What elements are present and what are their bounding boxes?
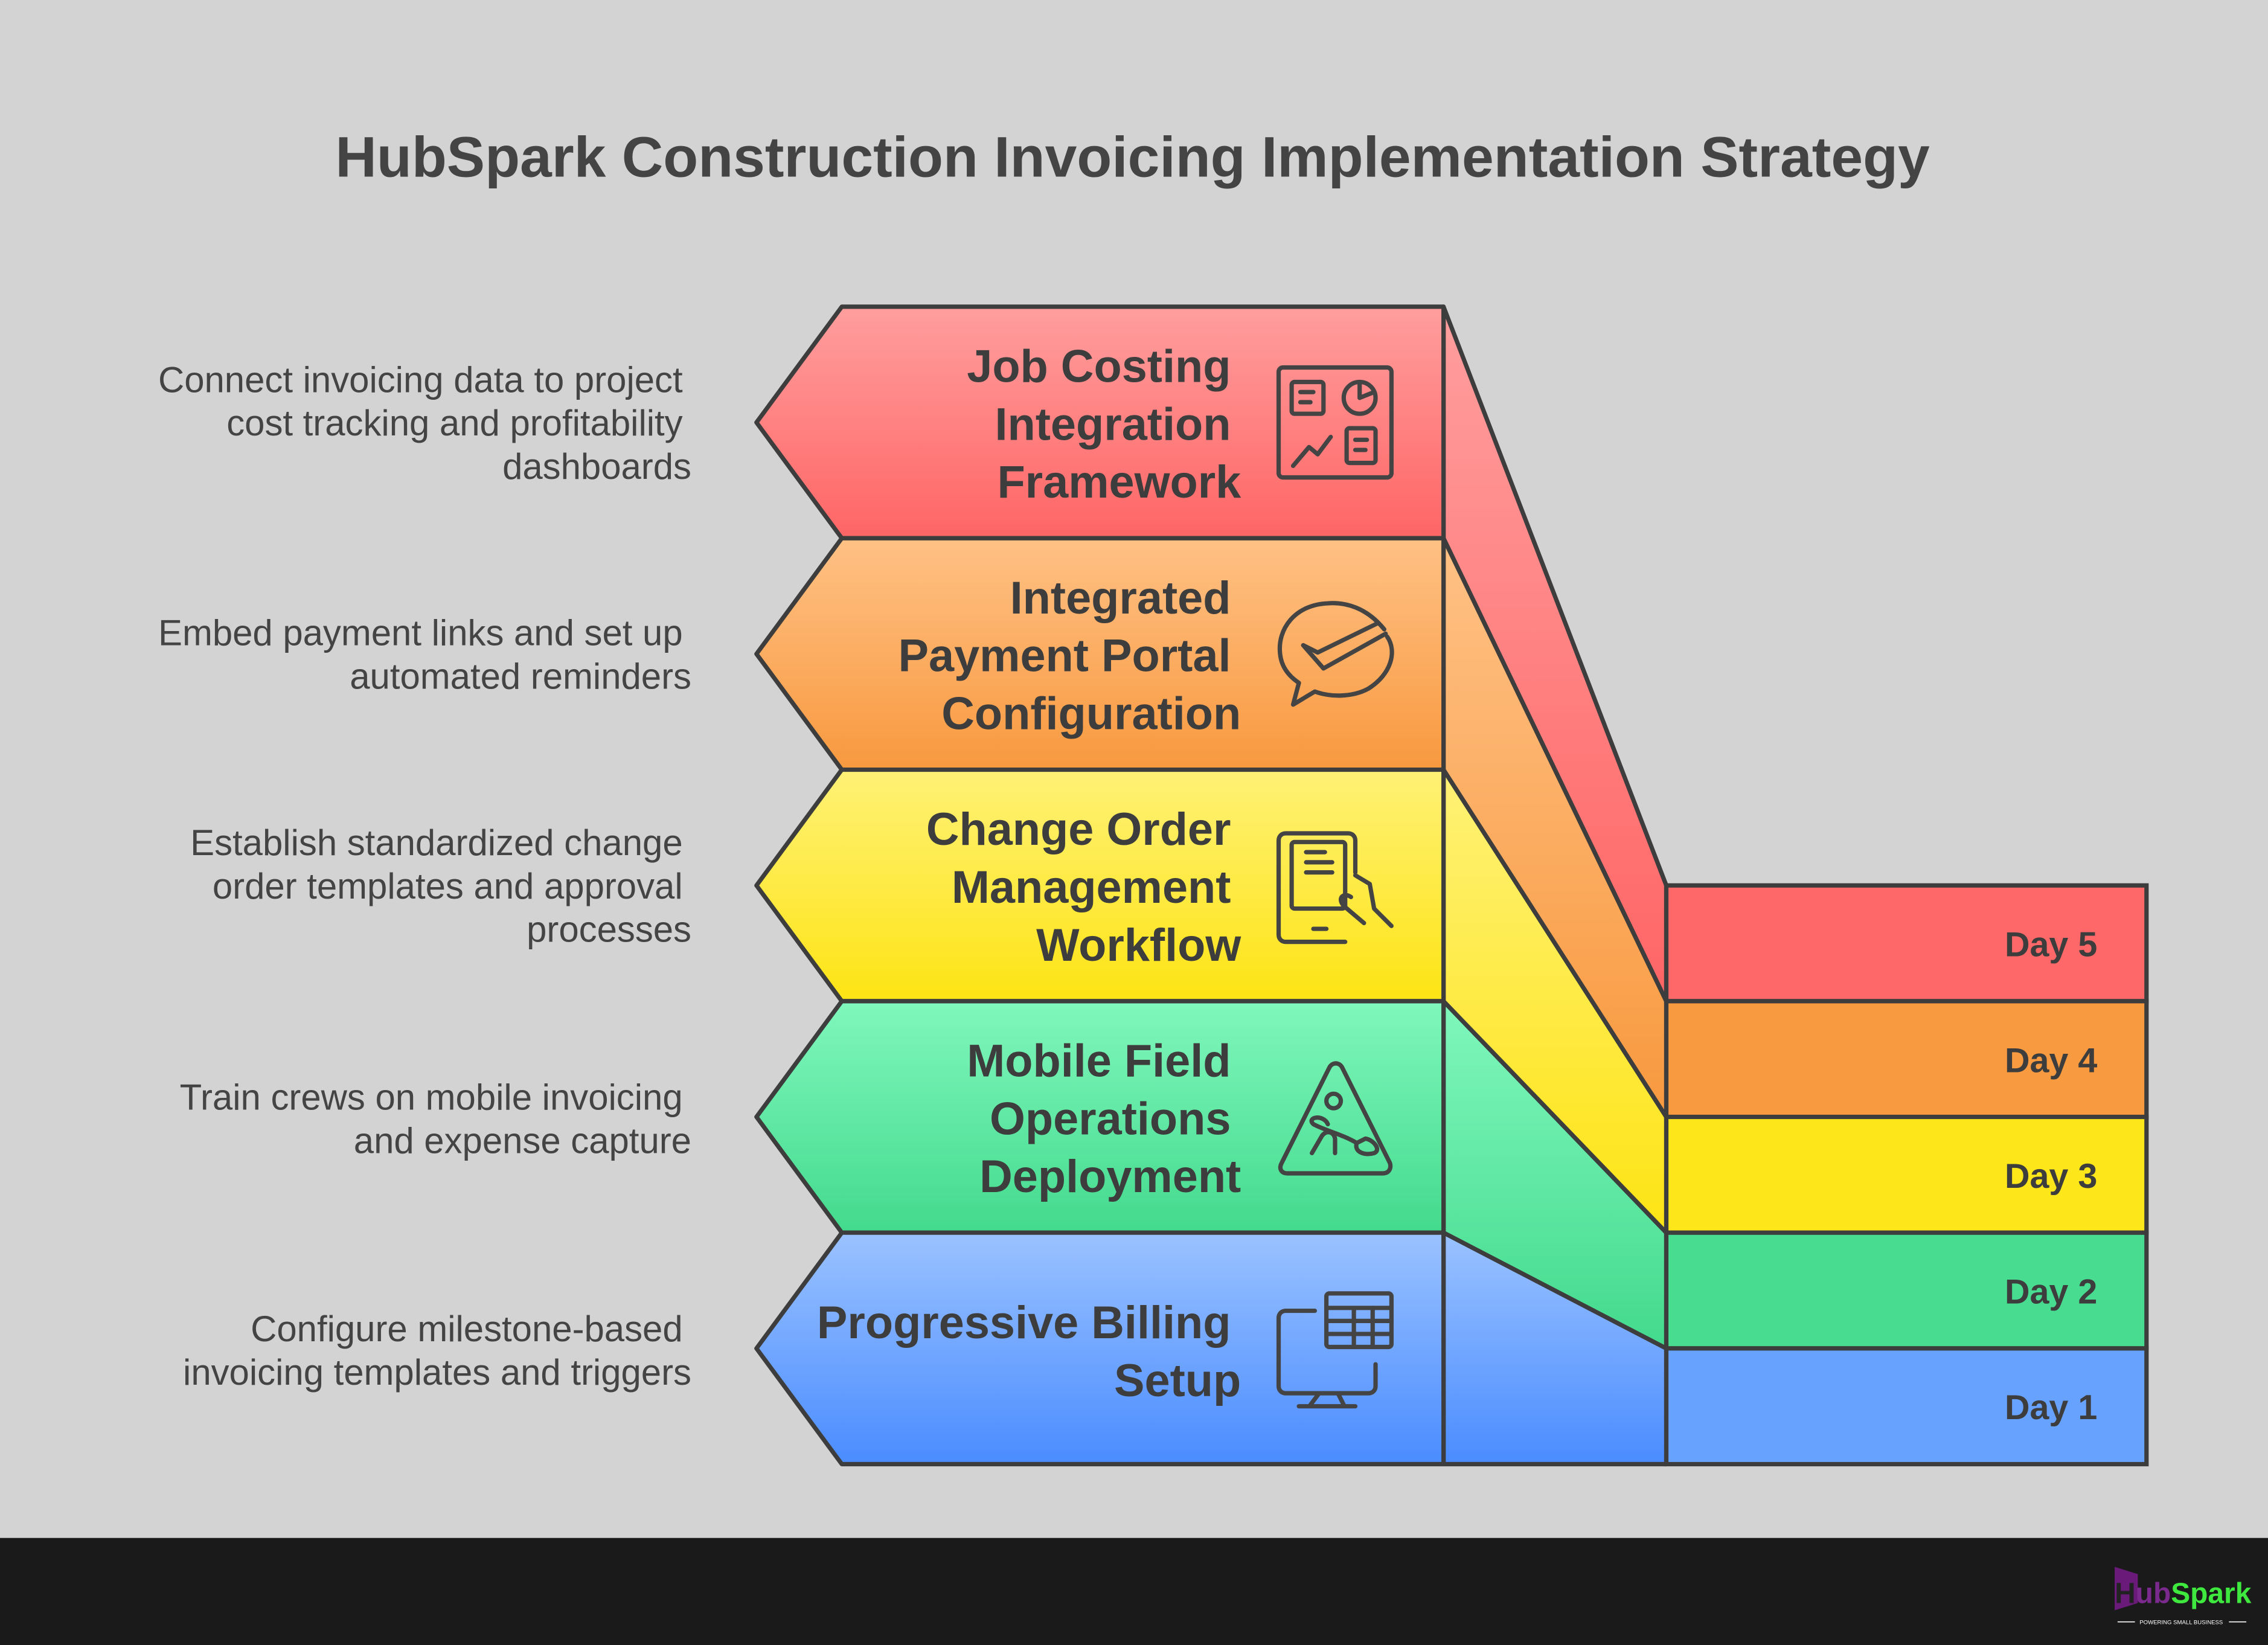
step 4: Payment Portal: Configuration	[941, 688, 1241, 739]
day 1 box: Day 1	[2005, 1388, 2097, 1427]
desc 1: Configure milestone-based	[251, 1309, 683, 1349]
desc 5: dashboards	[502, 446, 691, 487]
step 3: Change Order	[757, 770, 1444, 1001]
logo	[2115, 1567, 2252, 1626]
icon: construction sign	[1280, 1063, 1391, 1173]
step 5: Job Costing	[757, 307, 1444, 538]
day 1 box	[1667, 1348, 2147, 1464]
icon: tablet with hand	[1279, 833, 1391, 942]
step 3: Change Order: Change Order	[926, 804, 1231, 855]
step 2: Mobile Field: Deployment	[979, 1151, 1241, 1202]
step 4: Payment Portal	[757, 538, 1444, 770]
step 2: Mobile Field: Mobile Field	[967, 1035, 1231, 1086]
step 1: Progressive Billing: Setup	[1114, 1355, 1241, 1406]
step 1: Progressive Billing	[757, 1233, 1444, 1464]
ribbons connecting steps to days	[1444, 307, 1667, 1464]
desc 4: automated reminders	[350, 656, 691, 696]
step 2: Mobile Field	[757, 1001, 1444, 1233]
day 4 box	[1667, 1001, 2147, 1117]
title: HubSpark Construction Invoicing Implementation Strategy	[335, 125, 1930, 189]
desc 3: processes	[527, 909, 691, 950]
desc 3: order templates and approval	[213, 866, 683, 906]
description texts	[158, 359, 691, 1393]
icon: dashboard	[1279, 368, 1391, 478]
step 5: Job Costing: Job Costing	[967, 341, 1231, 392]
step 4: Payment Portal: Payment Portal	[899, 630, 1231, 682]
step 3: Change Order: Workflow	[1036, 920, 1241, 971]
day boxes	[1667, 885, 2147, 1464]
icon: chat check	[1280, 603, 1392, 705]
desc 4: Embed payment links and set up	[158, 613, 683, 653]
day 5 box: Day 5	[2005, 926, 2097, 964]
desc 5: Connect invoicing data to project	[158, 359, 683, 400]
logo: HubSpark	[2115, 1578, 2252, 1610]
step 2: Mobile Field: Operations	[990, 1093, 1231, 1144]
desc 5: cost tracking and profitability	[226, 403, 683, 443]
step 3: Change Order: Management	[952, 862, 1231, 913]
icon: monitor with table	[1279, 1294, 1391, 1406]
day 5 box	[1667, 885, 2147, 1001]
day 2 box	[1667, 1233, 2147, 1348]
step 4: Payment Portal: Integrated	[1010, 572, 1231, 624]
logo: POWERING SMALL BUSINESS	[2139, 1619, 2223, 1626]
day 3 box	[1667, 1117, 2147, 1233]
desc 1: invoicing templates and triggers	[183, 1352, 691, 1393]
day 4 box: Day 4	[2005, 1041, 2097, 1080]
desc 2: and expense capture	[354, 1120, 691, 1161]
step 1: Progressive Billing: Progressive Billing	[817, 1297, 1231, 1348]
step 5: Job Costing: Integration	[995, 399, 1231, 450]
step 5: Job Costing: Framework	[997, 457, 1241, 508]
day 3 box: Day 3	[2005, 1157, 2097, 1196]
desc 2: Train crews on mobile invoicing	[180, 1077, 683, 1118]
day 2 box: Day 2	[2005, 1273, 2097, 1312]
desc 3: Establish standardized change	[190, 822, 683, 863]
footer bar	[0, 1538, 2268, 1645]
